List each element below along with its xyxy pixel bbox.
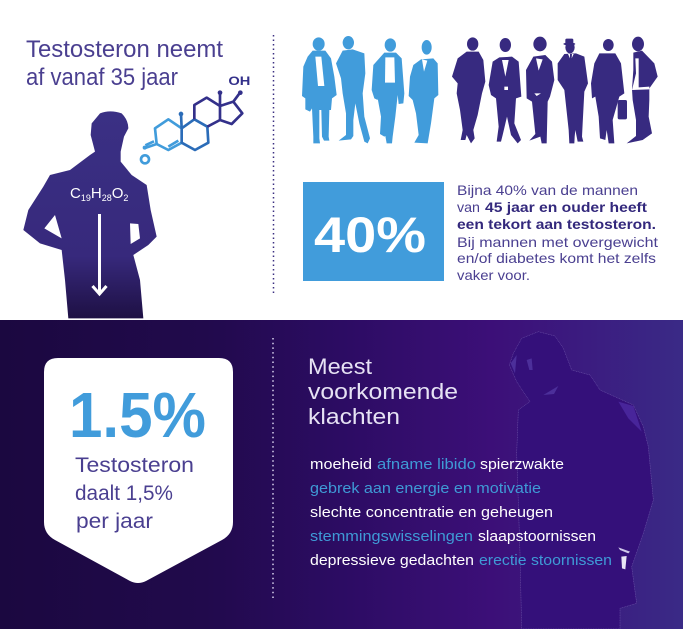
text block: 40% explanation: 45 jaar en ouder heeft: [485, 199, 647, 215]
group: six men in dark purple: [452, 37, 658, 143]
heading: most common complaints: klachten: [308, 404, 400, 429]
card: 1.5% per year: Testosteron: [75, 453, 194, 477]
figure: man looking down: [509, 332, 653, 629]
list: complaints: gebrek aan energie en motivatie: [310, 480, 541, 497]
panel: bottom section: [0, 320, 683, 629]
heading: most common complaints: voorkomende: [308, 379, 458, 404]
text block: 40% explanation: een tekort aan testosteron.: [457, 216, 656, 232]
text block: 40% explanation: vaker voor.: [457, 267, 530, 283]
icon: testosterone molecule: [141, 74, 250, 163]
card: 1.5% per year: [44, 358, 233, 583]
list: complaints: stemmingswisselingen: [310, 528, 473, 545]
arrow: downward: [92, 214, 106, 294]
heading: most common complaints: Meest: [308, 354, 372, 379]
formula: C19H28O2: 28: [102, 193, 112, 203]
icon: testosterone molecule: OH: [228, 74, 250, 88]
text block: 40% explanation: en/of diabetes komt het zelfs: [457, 250, 656, 266]
panel: top section: [0, 0, 683, 320]
list: complaints: erectie stoornissen: [479, 552, 612, 569]
text block: 40% explanation: Bijna 40% van de mannen: [457, 182, 638, 198]
figure: man silhouette with formula: [23, 111, 157, 318]
formula: C19H28O2: C: [70, 185, 81, 202]
list: complaints: slaapstoornissen: [478, 528, 596, 545]
list: complaints: depressieve gedachten: [310, 552, 474, 569]
callout: 40% box: 40%: [314, 207, 426, 263]
list: complaints: slechte concentratie en geheugen: [310, 504, 553, 521]
text block: 40% explanation: Bij mannen met overgewicht: [457, 234, 658, 250]
heading: most common complaints: [308, 354, 458, 429]
text block: 40% explanation: [457, 182, 658, 283]
heading: testosterone declines from 35: Testosteron neemt: [26, 36, 223, 63]
formula: C19H28O2: O: [112, 185, 123, 202]
heading: testosterone declines from 35: [26, 36, 223, 91]
formula: C19H28O2: H: [91, 185, 102, 202]
formula: C19H28O2: 2: [123, 193, 128, 203]
card: 1.5% per year: daalt 1,5%: [75, 481, 173, 505]
list: complaints: afname libido: [377, 456, 476, 473]
list: complaints: spierzwakte: [480, 456, 564, 473]
list: complaints: moeheid: [310, 456, 372, 473]
text block: 40% explanation: van: [457, 199, 480, 215]
list: complaints: [310, 456, 612, 569]
card: 1.5% per year: 1.5%: [69, 379, 206, 451]
formula: C19H28O2: 19: [81, 193, 91, 203]
group: four men in light blue: [302, 36, 438, 143]
heading: testosterone declines from 35: af vanaf 35 jaar: [26, 64, 178, 91]
card: 1.5% per year: per jaar: [76, 509, 153, 533]
callout: 40% box: [303, 182, 444, 281]
